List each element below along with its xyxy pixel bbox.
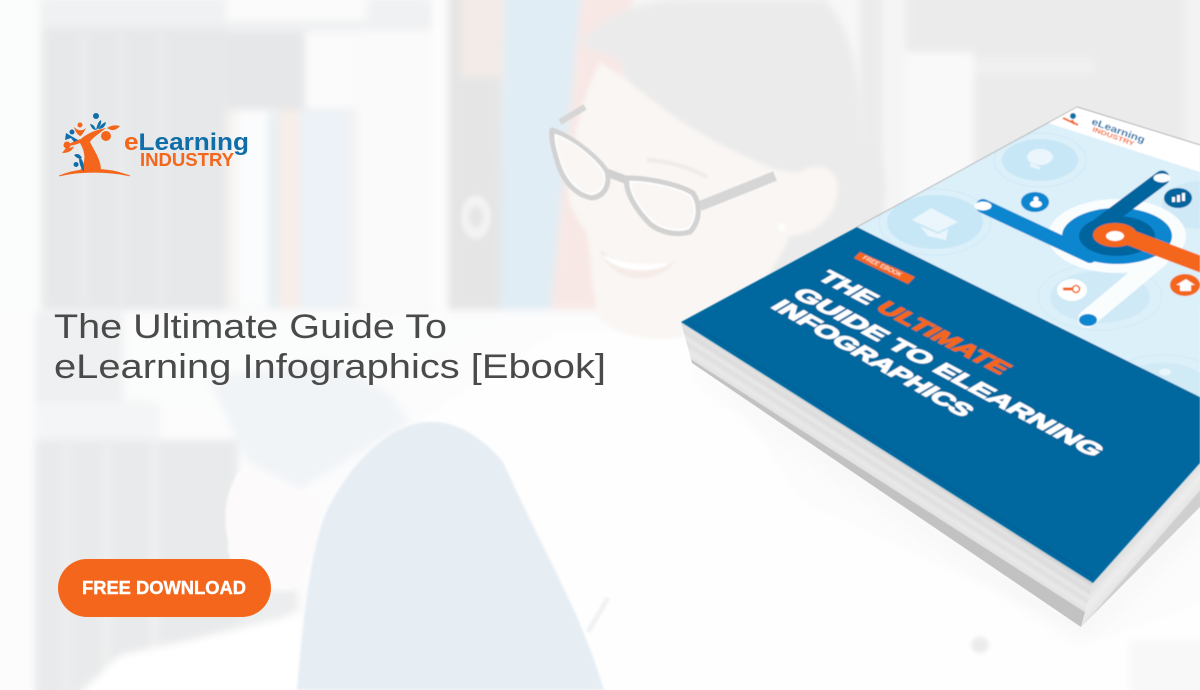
book side pages (1081, 463, 1200, 627)
sub: hand holding tablet (225, 470, 322, 590)
cover title (766, 267, 1111, 460)
cover tag: free ebook (854, 252, 915, 284)
title (54, 308, 606, 386)
pale circle: graduation cap (887, 195, 983, 250)
mini wordmark: eLearning (1090, 116, 1147, 146)
logo wordmark: eLearning (124, 129, 249, 156)
cover title line 3: INFOGRAPHICS (766, 296, 981, 420)
blue arm (983, 206, 1090, 256)
sub: glasses (552, 107, 775, 234)
sub: smile (600, 250, 675, 279)
mini sub-wordmark: INDUSTRY (1091, 126, 1136, 148)
dark ring (1079, 216, 1155, 256)
book cover (681, 107, 1200, 583)
cover title line 1: THE ULTIMATE (812, 267, 1018, 377)
orange arm (1118, 233, 1200, 267)
cover blue area (681, 227, 1200, 583)
dark arm (1090, 178, 1162, 232)
logo: eLearning Industry (59, 113, 249, 176)
pale circle: bottom (1140, 364, 1200, 398)
sub: bracelet (588, 598, 608, 632)
pale circle: lower (1050, 272, 1150, 322)
button label: FREE DOWNLOAD (82, 577, 246, 598)
sub: binder ring (461, 195, 491, 239)
button: free download (58, 559, 271, 617)
end dots (974, 174, 1170, 326)
cover white header (1048, 107, 1200, 172)
pale circle: right (1162, 181, 1200, 229)
cover title line 2: GUIDE TO ELEARNING (787, 284, 1111, 460)
icon: home (1170, 274, 1200, 296)
center dot (1106, 231, 1124, 241)
white ring (1048, 199, 1186, 273)
title line 2: eLearning Infographics [Ebook] (54, 348, 606, 386)
pale circle: lightbulb (1002, 139, 1078, 181)
icon: key (1057, 279, 1087, 301)
sub: earring (778, 222, 786, 232)
orange ring (1093, 223, 1137, 247)
cover illustration (887, 139, 1200, 398)
cover light blue area (857, 123, 1200, 397)
tag label: FREE EBOOK (861, 255, 904, 278)
cover mini logo (1063, 113, 1147, 148)
title line 1: The Ultimate Guide To (54, 308, 447, 346)
icon: bars (1164, 188, 1192, 208)
sub: small round object (971, 637, 989, 653)
icon: user (1021, 192, 1049, 212)
sub: knee in jeans (297, 422, 604, 690)
ebook 3D mockup (681, 107, 1200, 640)
mini tree (1063, 118, 1078, 125)
blue ring (1062, 208, 1172, 264)
sub: face (568, 62, 838, 339)
logo tree icon (59, 113, 130, 176)
book spine pages (681, 322, 1093, 627)
book shadow (692, 366, 1200, 640)
sub: hair (580, 0, 885, 345)
white arm (1087, 258, 1160, 319)
logo sub-wordmark: INDUSTRY (140, 149, 235, 170)
sub: eyebrow (647, 160, 707, 177)
